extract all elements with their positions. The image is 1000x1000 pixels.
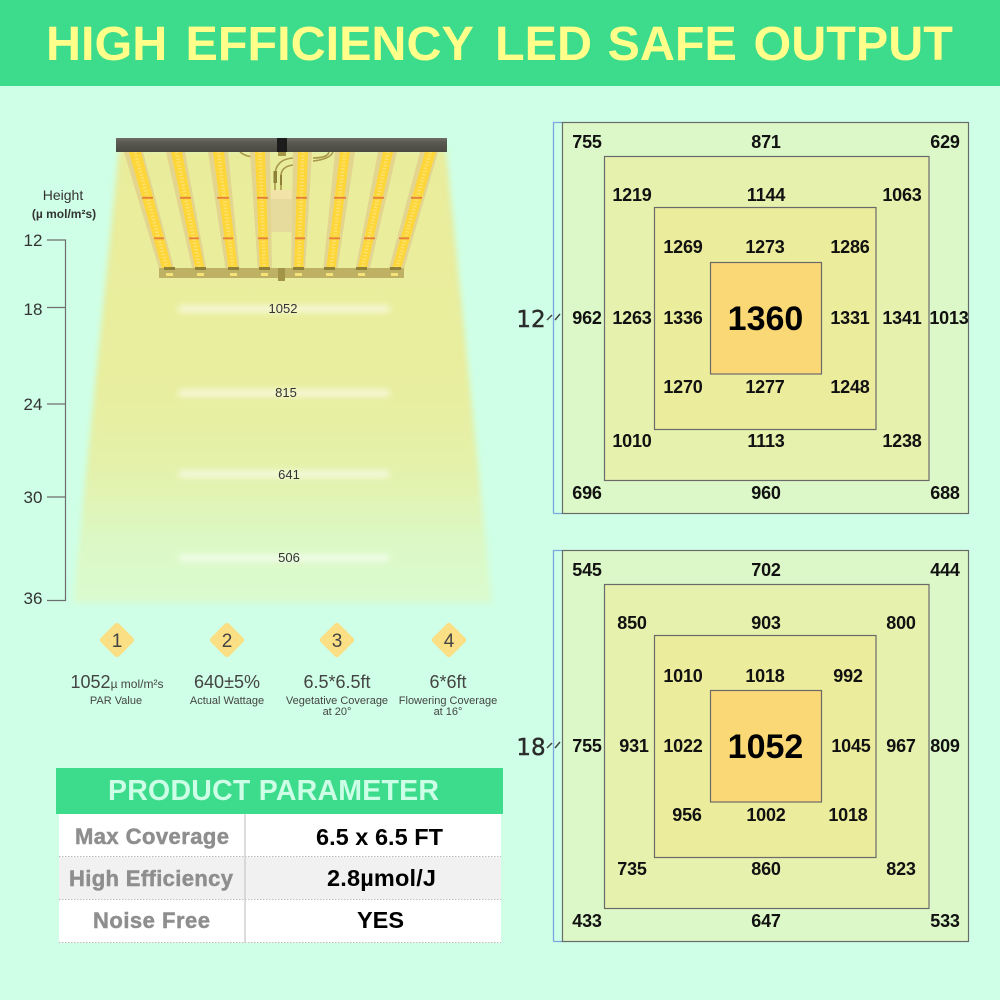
readings: 647 [751, 911, 781, 931]
feature 1: PAR value [71, 622, 163, 707]
distance label 18: 18 [516, 735, 546, 761]
readings: 1010 [663, 666, 703, 686]
feature 2: actual wattage: 640±5% [194, 672, 260, 692]
row: high efficiency: High Efficiency [69, 866, 234, 891]
scale heading [32, 187, 96, 221]
lower rail [159, 267, 404, 281]
feature 4: flowering coverage: at 16° [434, 706, 462, 718]
readings: 823 [886, 859, 916, 879]
readings: 1248 [830, 377, 870, 397]
readings: 1022 [663, 736, 703, 756]
row: high efficiency: 2.8µmol/J [327, 865, 436, 891]
readings: 1063 [882, 185, 922, 205]
title: SAFE [608, 17, 737, 71]
feature 4: flowering coverage: 4 [444, 631, 455, 652]
PPFD readings at heights: 815 [275, 385, 297, 400]
feature 3: vegetative coverage: at 20° [323, 706, 351, 718]
readings: 433 [572, 911, 602, 931]
feature 2: actual wattage: Actual Wattage [190, 695, 264, 707]
readings: 967 [886, 736, 916, 756]
readings: 903 [751, 613, 781, 633]
readings: 860 [751, 859, 781, 879]
readings: 1341 [882, 308, 922, 328]
readings: 871 [751, 132, 781, 152]
title banner [0, 0, 1000, 86]
feature 3: vegetative coverage: Vegetative Coverage [286, 695, 388, 707]
readings: 956 [672, 805, 702, 825]
readings: 1336 [663, 308, 703, 328]
readings: 533 [930, 911, 960, 931]
row: noise free: Noise Free [93, 908, 210, 933]
center reading: 1052 [728, 728, 803, 766]
readings: 1331 [830, 308, 870, 328]
readings: 850 [617, 613, 647, 633]
readings: 809 [930, 736, 960, 756]
feature 3: vegetative coverage [286, 622, 388, 718]
title: HIGH [46, 17, 167, 71]
table heading: PRODUCT PARAMETER [108, 775, 439, 807]
height scale [24, 187, 96, 608]
table heading [56, 768, 503, 814]
readings: 931 [619, 736, 649, 756]
panel: PPFD map at 18 inches [516, 550, 968, 942]
wires [240, 152, 333, 198]
scale heading: Height [43, 187, 83, 203]
top rail [116, 138, 447, 156]
readings: 629 [930, 132, 960, 152]
readings: 1286 [830, 237, 870, 257]
panel: product parameter table [56, 768, 503, 943]
readings: 962 [572, 308, 602, 328]
readings: 755 [572, 736, 602, 756]
readings: 688 [930, 483, 960, 503]
distance label 18 [516, 735, 560, 761]
readings: 1018 [745, 666, 785, 686]
light cone [73, 150, 492, 603]
feature 4: flowering coverage: Flowering Coverage [399, 695, 497, 707]
readings: 1010 [612, 431, 652, 451]
PPFD readings at heights [178, 301, 390, 565]
readings: 960 [751, 483, 781, 503]
readings: 992 [833, 666, 863, 686]
PPFD readings at heights: 641 [278, 467, 300, 482]
readings: 1238 [882, 431, 922, 451]
readings: 1144 [747, 185, 785, 205]
feature 1: PAR value: 1052µ mol/m²s [71, 672, 163, 692]
readings: 1002 [746, 805, 786, 825]
feature 1: PAR value: PAR Value [90, 695, 142, 707]
readings: 735 [617, 859, 647, 879]
PPFD readings at heights: 506 [278, 550, 300, 565]
feature 2: actual wattage [190, 622, 264, 707]
bars [124, 152, 438, 272]
scale labels: 24 [24, 395, 42, 414]
row: noise free: YES [357, 907, 404, 933]
readings [572, 560, 960, 931]
scale labels: 36 [24, 589, 42, 608]
readings: 1045 [831, 736, 871, 756]
readings: 702 [751, 560, 781, 580]
clips [142, 198, 422, 238]
title: LED [495, 17, 592, 71]
distance label 12 [516, 307, 560, 333]
readings: 755 [572, 132, 602, 152]
row: noise free [93, 907, 404, 933]
feature row [71, 622, 497, 718]
panel: PPFD map at 12 inches [516, 122, 969, 514]
scale labels: 30 [24, 488, 42, 507]
feature 1: PAR value: 1 [112, 631, 122, 652]
row: max coverage [75, 824, 444, 850]
readings: 1113 [747, 431, 785, 451]
feature 4: flowering coverage [399, 622, 497, 718]
scale labels: 12 [24, 231, 42, 250]
readings: 1270 [663, 377, 703, 397]
feature 3: vegetative coverage: 3 [332, 631, 342, 652]
readings: 800 [886, 613, 916, 633]
feature 2: actual wattage: 2 [222, 631, 232, 652]
readings: 1277 [745, 377, 785, 397]
row: max coverage: 6.5 x 6.5 FT [316, 824, 444, 850]
readings: 696 [572, 483, 602, 503]
feature 4: flowering coverage: 6*6ft [429, 672, 467, 692]
icon: LED grow light fixture [116, 138, 447, 281]
readings: 1018 [828, 805, 868, 825]
readings: 545 [572, 560, 602, 580]
scale labels: 18 [24, 300, 42, 319]
row: max coverage: Max Coverage [75, 824, 229, 849]
row: high efficiency [69, 865, 436, 891]
feature 3: vegetative coverage: 6.5*6.5ft [303, 672, 371, 692]
driver box [271, 171, 293, 232]
readings: 1013 [929, 308, 969, 328]
readings: 1219 [612, 185, 652, 205]
LED dots [135, 152, 430, 272]
readings [572, 132, 969, 503]
PPFD readings at heights: 1052 [269, 301, 297, 316]
center reading: 1360 [728, 300, 803, 338]
readings: 1263 [612, 308, 652, 328]
readings: 1273 [745, 237, 785, 257]
title: OUTPUT [754, 17, 953, 71]
distance label 12: 12 [516, 307, 546, 333]
readings: 1269 [663, 237, 703, 257]
scale heading: (µ mol/m²s) [32, 207, 96, 221]
readings: 444 [930, 560, 960, 580]
title: EFFICIENCY [186, 17, 473, 71]
scale labels [24, 231, 42, 608]
